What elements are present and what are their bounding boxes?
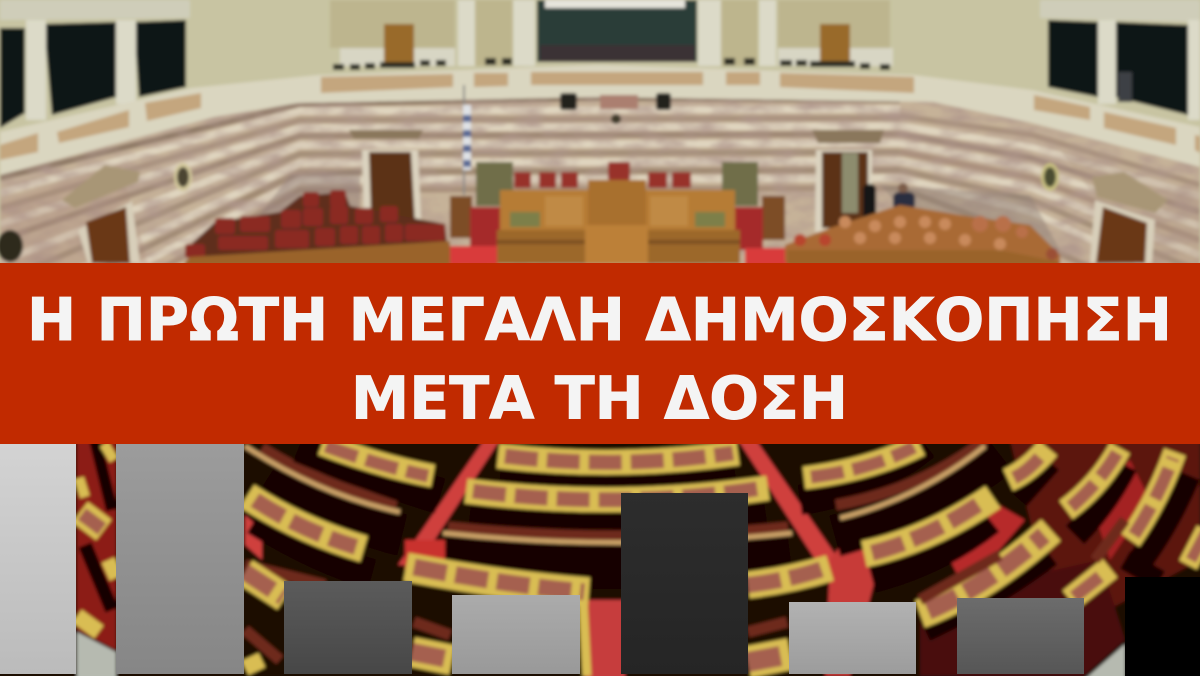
grey floor corners <box>77 632 1125 676</box>
photo: parliament upper chamber <box>0 0 1200 288</box>
front benches <box>185 241 1060 266</box>
cornices <box>0 0 1200 66</box>
marble wall <box>0 97 1200 270</box>
bar 5 <box>621 493 748 674</box>
bar 2 <box>116 444 244 674</box>
bar 4 <box>452 595 580 674</box>
balustrade panels <box>0 72 1200 160</box>
central dark gallery <box>537 0 697 62</box>
door: centre left <box>349 130 423 240</box>
speaker's podium <box>497 180 740 264</box>
photo: parliament lower chamber seating <box>0 440 1200 676</box>
bar 8 <box>1125 577 1200 676</box>
bar 6 <box>789 602 916 674</box>
right balcony windows <box>1048 20 1188 115</box>
presidium chairs <box>514 162 691 188</box>
red carpet aisles <box>77 440 1200 676</box>
left rows <box>77 440 587 676</box>
marble courses <box>0 96 1200 263</box>
door: far left <box>62 165 140 263</box>
left balcony windows <box>0 20 186 128</box>
bar chart overlay <box>0 444 1200 676</box>
bar 7 <box>957 598 1084 674</box>
green wall panels <box>476 162 758 206</box>
side wooden stands <box>450 196 785 240</box>
flag <box>463 85 471 195</box>
red title banner <box>0 263 1200 444</box>
left deputies' seats <box>185 190 447 258</box>
centre rows <box>406 453 830 662</box>
bar 3 <box>284 581 412 674</box>
right deputies' seats <box>785 205 1060 262</box>
door: centre right with figures <box>812 130 915 232</box>
red steps and floor <box>450 207 787 268</box>
bar 1 <box>0 444 76 674</box>
title line 1: Η ΠΡΩΤΗ ΜΕΓΑΛΗ ΔΗΜΟΣΚΟΠΗΣΗ <box>27 285 1172 354</box>
speakers and emblem <box>560 93 671 124</box>
wall medallions <box>0 163 1059 262</box>
title line 2: ΜΕΤΑ ΤΗ ΔΟΣΗ <box>351 364 848 432</box>
gallery chairs <box>333 58 890 70</box>
gallery doors <box>384 24 850 65</box>
door: far right <box>1090 172 1168 263</box>
right rows <box>800 440 1200 630</box>
columns <box>26 0 1200 120</box>
white ledge <box>0 65 1200 175</box>
